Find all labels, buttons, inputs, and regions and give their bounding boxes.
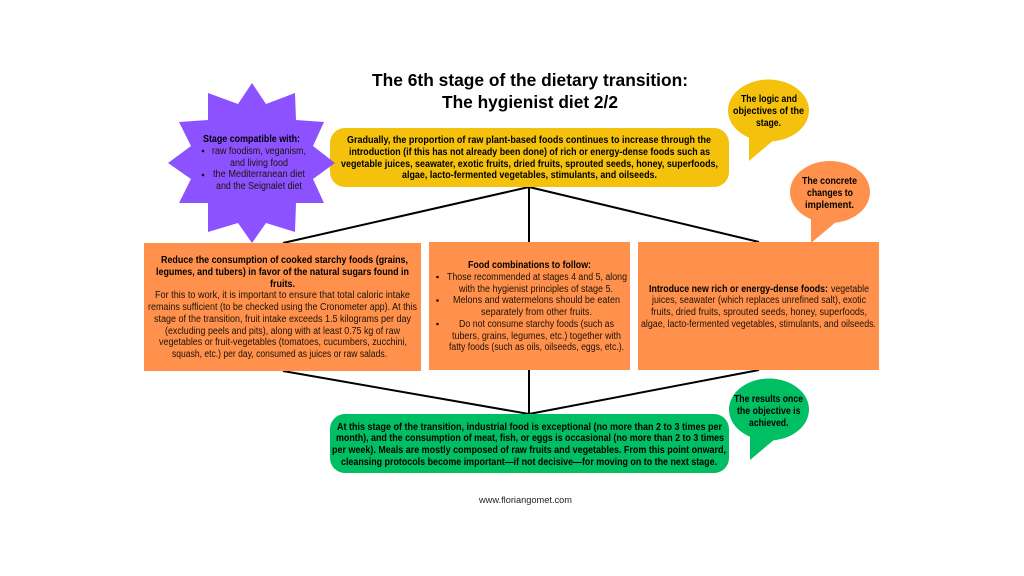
panel: results: per week). Meals are mostly composed of raw fruits and vegetables. From this point onward, [332, 445, 726, 456]
panel: food combinations: tubers, grains, legumes, etc.) together with [452, 331, 621, 342]
callout: results [729, 378, 809, 460]
panel: stage compatible starburst: raw foodism, veganism, [212, 146, 306, 157]
callout: concrete changes: changes to [807, 188, 853, 199]
title [372, 70, 688, 112]
panel: introduce new foods: juices, seawater (which replaces unrefined salt), exotic [651, 295, 866, 306]
panel: logic and objectives: Gradually, the proportion of raw plant-based foods continues to increase through the [347, 135, 711, 146]
panel: food combinations: with the hygienist principles of stage 5. [458, 284, 613, 295]
panel: reduce cooked starchy foods: (excluding peels and pits), along with at least 0.75 kg of raw [165, 326, 401, 337]
panel: introduce new foods: Introduce new rich or energy-dense foods: [649, 284, 828, 295]
panel: food combinations: separately from other fruits. [481, 307, 592, 318]
callout: concrete changes: implement. [805, 200, 854, 211]
panel: reduce cooked starchy foods: legumes, and tubers) in favor of the natural sugars found in [156, 267, 409, 278]
panel: logic and objectives: introduction (if this has not already been done) of rich or energy-dense foods such as [349, 147, 710, 158]
callout: logic and objectives: stage. [756, 118, 781, 129]
panel: introduce new foods: fruits, dried fruits, sprouted seeds, honey, superfoods, [651, 307, 867, 318]
panel: food combinations: fatty foods (such as oils, oilseeds, eggs, etc.). [449, 342, 624, 353]
panel: results: At this stage of the transition, industrial food is exceptional (no more than 2 to 3 times per [337, 422, 722, 433]
callout: results: The results once [734, 394, 803, 405]
connector lines: objectives to changes [283, 187, 759, 243]
callout: results: achieved. [749, 418, 789, 429]
callout: results: the objective is [737, 406, 801, 417]
panel: reduce cooked starchy foods [144, 243, 421, 371]
callout: concrete changes [790, 161, 870, 243]
panel: stage compatible starburst: Stage compatible with: [203, 134, 300, 145]
panel: reduce cooked starchy foods: squash, etc.) per day, consumed as juices or raw salads. [172, 349, 387, 360]
panel: reduce cooked starchy foods: Reduce the consumption of cooked starchy foods (grains, [161, 255, 408, 266]
title: The 6th stage of the dietary transition: [372, 70, 688, 90]
panel: logic and objectives: vegetable juices, seawater, exotic fruits, dried fruits, sprouted seeds, honey, superfoods, [341, 159, 718, 170]
panel: food combinations: Melons and watermelons should be eaten [453, 295, 620, 306]
panel: reduce cooked starchy foods: stage of the transition, fruit intake exceeds 1.5 kilograms per day [154, 314, 411, 325]
panel: introduce new foods: vegetable [831, 284, 869, 295]
panel: reduce cooked starchy foods: fruits. [270, 279, 295, 290]
panel: stage compatible starburst [168, 83, 335, 243]
panel: results [330, 414, 729, 473]
panel: results: month), and the consumption of meat, fish, or eggs is occasional (no more than 2 to 3 times [336, 433, 724, 444]
panel: results: cleansing protocols become important—if not decisive—for moving on to the next stage. [341, 457, 717, 468]
connector lines: changes to results [283, 370, 759, 414]
panel: stage compatible starburst: and living food [230, 158, 288, 169]
panel: logic and objectives [330, 128, 729, 187]
panel: food combinations: Those recommended at stages 4 and 5, along [447, 272, 627, 283]
panel: introduce new foods: algae, lacto-fermented vegetables, stimulants, and oilseeds. [641, 319, 876, 330]
callout: logic and objectives: The logic and [741, 94, 797, 105]
panel: food combinations [429, 242, 630, 370]
panel: reduce cooked starchy foods: vegetables or fruit-vegetables (tomatoes, cucumbers, zucchini, [159, 337, 407, 348]
panel: reduce cooked starchy foods: For this to work, it is important to ensure that total caloric intake [155, 290, 410, 301]
title: The hygienist diet 2/2 [442, 92, 618, 112]
panel: food combinations: Food combinations to follow: [468, 260, 591, 271]
panel: food combinations: Do not consume starchy foods (such as [459, 319, 614, 330]
panel: logic and objectives: algae, lacto-fermented vegetables, stimulants, and oilseeds. [402, 170, 657, 181]
callout: concrete changes: The concrete [802, 176, 857, 187]
panel: introduce new foods [638, 242, 879, 370]
callout: logic and objectives: objectives of the [733, 106, 804, 117]
panel: reduce cooked starchy foods: remains sufficient (to be checked using the Cronometer app). At this [148, 302, 417, 313]
panel: stage compatible starburst: and the Seignalet diet [216, 181, 302, 192]
callout: logic and objectives [728, 80, 809, 161]
footer website: www.floriangomet.com [478, 495, 572, 505]
panel: stage compatible starburst: the Mediterranean diet [213, 169, 305, 180]
